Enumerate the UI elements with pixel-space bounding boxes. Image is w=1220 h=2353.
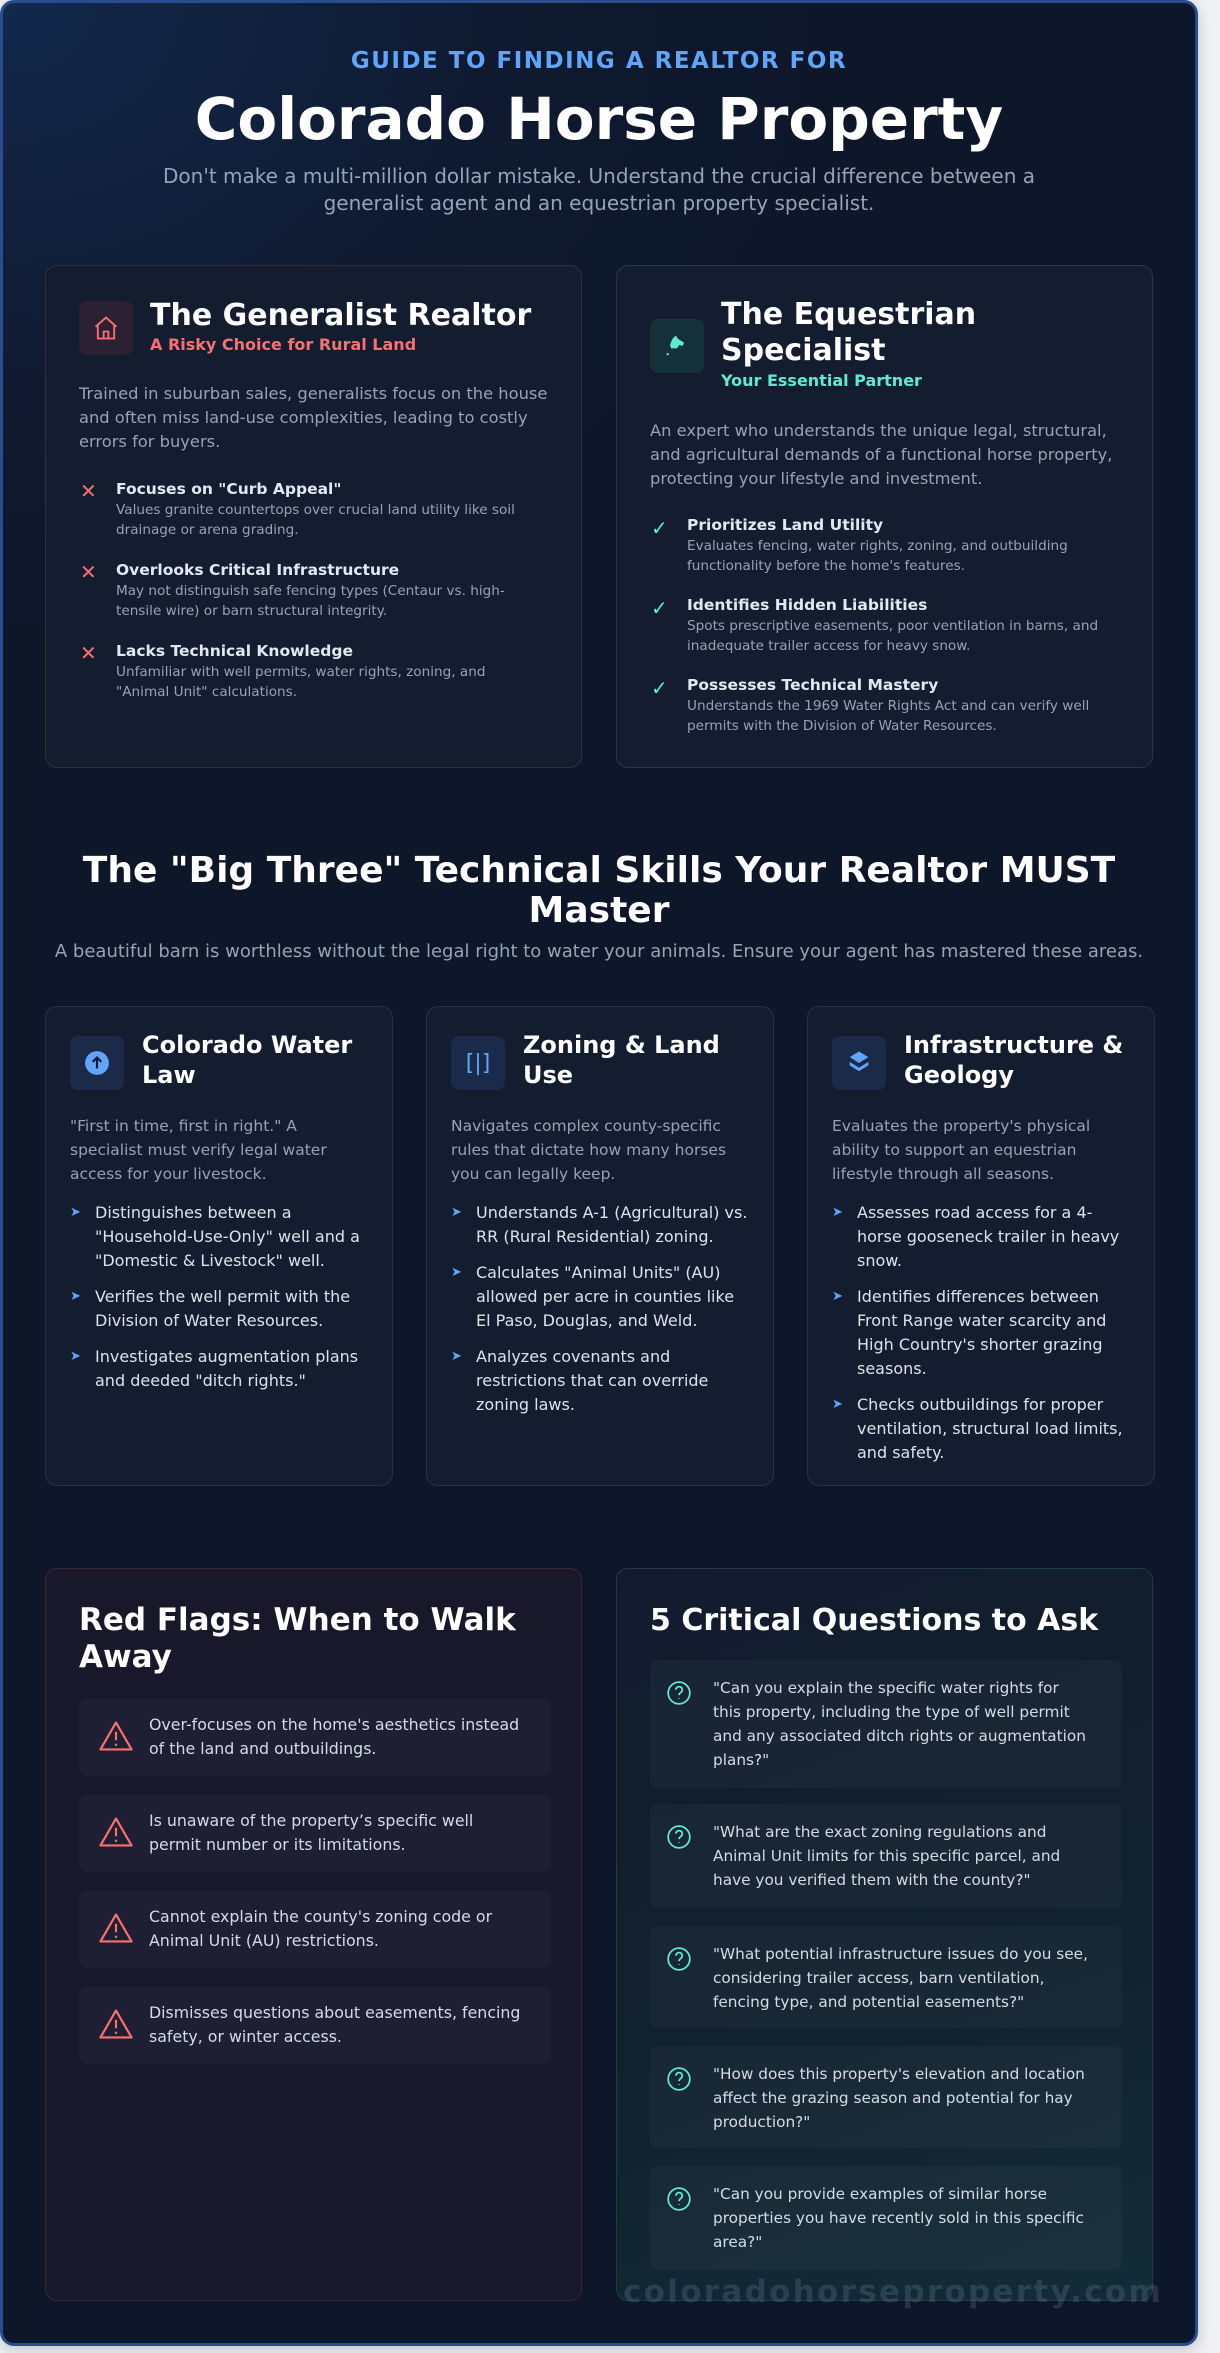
list: ➤ [832, 1397, 843, 1412]
question list [667, 1679, 1088, 2251]
icon: layers [832, 1036, 886, 1090]
heading: Red Flags: When to Walk Away [79, 1602, 516, 1675]
list: strengths: Understands the 1969 Water Rights Act and can verify well permits with the Division of Water Resources. [687, 698, 1089, 734]
list: strengths: Possesses Technical Mastery [687, 676, 938, 694]
section subtitle: A beautiful barn is worthless without the legal right to water your animals. Ensure your agent has mastered these areas. [55, 941, 1143, 962]
description: An expert who understands the unique legal, structural, and agricultural demands of a functional horse property, protecting your lifestyle and investment. [650, 421, 1112, 488]
icon: zoning: [|] [466, 1050, 490, 1076]
subtitle: Don't make a multi-million dollar mistake. Understand the crucial difference between a generalist agent and an equestrian property specialist. [163, 164, 1035, 215]
heading [720, 297, 976, 390]
panel: infrastructure [807, 1006, 1155, 1486]
list [832, 1203, 1123, 1462]
question list: "Can you provide examples of similar horse [713, 2185, 1047, 2203]
list: weaknesses: ✕ [80, 560, 97, 584]
icon: zoning [451, 1036, 505, 1090]
list: strengths: ✓ [651, 516, 668, 540]
list: ➤ [451, 1349, 462, 1364]
flag list: Over-focuses on the home's aesthetics instead of the land and outbuildings. [149, 1715, 519, 1758]
panel: zoning [426, 1006, 774, 1486]
panel: specialist [616, 265, 1153, 768]
list: weaknesses: ✕ [80, 479, 97, 503]
title: Colorado Horse Property [195, 85, 1003, 153]
section heading: big three [55, 850, 1143, 962]
question list: "What potential infrastructure issues do you see, [713, 1945, 1088, 1963]
list: weaknesses: Unfamiliar with well permits, water rights, zoning, and "Animal Unit" calculations. [116, 664, 485, 700]
list: strengths: Spots prescriptive easements, poor ventilation in barns, and inadequate trailer access for heavy snow. [687, 618, 1098, 654]
heading [150, 298, 532, 354]
list: Calculates "Animal Units" (AU) allowed per acre in counties like El Paso, Douglas, and Weld. [476, 1263, 734, 1330]
heading: Infrastructure & Geology [904, 1031, 1123, 1089]
list: ➤ [451, 1265, 462, 1280]
question list: fencing type, and potential easements?" [713, 1993, 1024, 2011]
description: Trained in suburban sales, generalists focus on the house and often miss land-use complexities, leading to costly errors for buyers. [79, 384, 547, 451]
icon: water [70, 1036, 124, 1090]
flag list [79, 1698, 551, 2064]
question list: "What are the exact zoning regulations and [713, 1823, 1046, 1841]
question list: have you verified them with the county?" [713, 1871, 1030, 1889]
question list: this property, including the type of well permit [713, 1703, 1070, 1721]
question list: plans?" [713, 1751, 769, 1769]
icon: house [79, 301, 133, 355]
list: strengths: Evaluates fencing, water rights, zoning, and outbuilding functionality before the home's features. [687, 538, 1068, 574]
question list: area?" [713, 2233, 762, 2251]
heading: Your Essential Partner [721, 371, 922, 390]
question list: production?" [713, 2113, 810, 2131]
list: weaknesses: Focuses on "Curb Appeal" [116, 480, 341, 498]
question list: affect the grazing season and potential for hay [713, 2089, 1073, 2107]
panel: red flags [45, 1568, 582, 2301]
panel: questions [616, 1568, 1153, 2301]
question list: and any associated ditch rights or augmentation [713, 1727, 1086, 1745]
list: weaknesses: Overlooks Critical Infrastructure [116, 561, 399, 579]
question list: "Can you explain the specific water rights for [713, 1679, 1059, 1697]
list: ➤ [451, 1205, 462, 1220]
heading: A Risky Choice for Rural Land [150, 335, 416, 354]
list: strengths: ✓ [651, 596, 668, 620]
list: Identifies differences between Front Range water scarcity and High Country's shorter grazing seasons. [857, 1287, 1106, 1378]
list: weaknesses: ✕ [80, 641, 97, 665]
flag list: Cannot explain the county's zoning code or Animal Unit (AU) restrictions. [149, 1907, 492, 1950]
list: Verifies the well permit with the Division of Water Resources. [95, 1287, 350, 1330]
question list: properties you have recently sold in this specific [713, 2209, 1084, 2227]
heading: Zoning & Land Use [523, 1031, 720, 1089]
question list: "How does this property's elevation and location [713, 2065, 1085, 2083]
list: strengths: Identifies Hidden Liabilities [687, 596, 927, 614]
question list: Animal Unit limits for this specific parcel, and [713, 1847, 1060, 1865]
kicker: GUIDE TO FINDING A REALTOR FOR [351, 48, 847, 74]
heading: Colorado Water Law [142, 1031, 352, 1089]
description: "First in time, first in right." A specialist must verify legal water access for your livestock. [70, 1117, 327, 1183]
list: Checks outbuildings for proper ventilation, structural load limits, and safety. [857, 1395, 1123, 1462]
list: ➤ [70, 1349, 81, 1364]
list: ➤ [832, 1289, 843, 1304]
description: Evaluates the property's physical ability to support an equestrian lifestyle through all seasons. [832, 1117, 1090, 1183]
flag list: Is unaware of the property’s specific well permit number or its limitations. [149, 1811, 473, 1854]
watermark: coloradohorseproperty.com [623, 2274, 1163, 2310]
heading: The Generalist Realtor [150, 298, 531, 333]
list: Distinguishes between a "Household-Use-Only" well and a "Domestic & Livestock" well. [95, 1203, 360, 1270]
list [451, 1203, 747, 1414]
icon: horse [650, 319, 704, 373]
list: weaknesses: Values granite countertops over crucial land utility like soil drainage or arena grading. [116, 502, 515, 538]
list: weaknesses: Lacks Technical Knowledge [116, 642, 353, 660]
list: Understands A-1 (Agricultural) vs. RR (Rural Residential) zoning. [476, 1203, 747, 1246]
list: Assesses road access for a 4-horse gooseneck trailer in heavy snow. [857, 1203, 1119, 1270]
list: strengths [651, 516, 1098, 734]
list: Analyzes covenants and restrictions that can override zoning laws. [476, 1347, 708, 1414]
heading: The Equestrian [721, 297, 976, 332]
section heading: big three: The "Big Three" Technical Skills Your Realtor MUST Master [83, 850, 1115, 931]
heading: Specialist [721, 333, 886, 368]
heading: 5 Critical Questions to Ask [650, 1603, 1098, 1638]
header [163, 48, 1035, 215]
description: Navigates complex county-specific rules that dictate how many horses you can legally keep. [451, 1117, 726, 1183]
flag list: Dismisses questions about easements, fencing safety, or winter access. [149, 2003, 520, 2046]
list: strengths: ✓ [651, 676, 668, 700]
list: ➤ [832, 1205, 843, 1220]
list [70, 1203, 360, 1390]
question list: considering trailer access, barn ventilation, [713, 1969, 1044, 1987]
list: Investigates augmentation plans and deeded "ditch rights." [95, 1347, 358, 1390]
list: ➤ [70, 1205, 81, 1220]
list: ➤ [70, 1289, 81, 1304]
panel: water law [45, 1006, 393, 1486]
list: strengths: Prioritizes Land Utility [687, 516, 883, 534]
list: weaknesses: May not distinguish safe fencing types (Centaur vs. high-tensile wire) or barn structural integrity. [116, 583, 505, 619]
panel: generalist [45, 265, 582, 768]
list: weaknesses [80, 479, 515, 700]
